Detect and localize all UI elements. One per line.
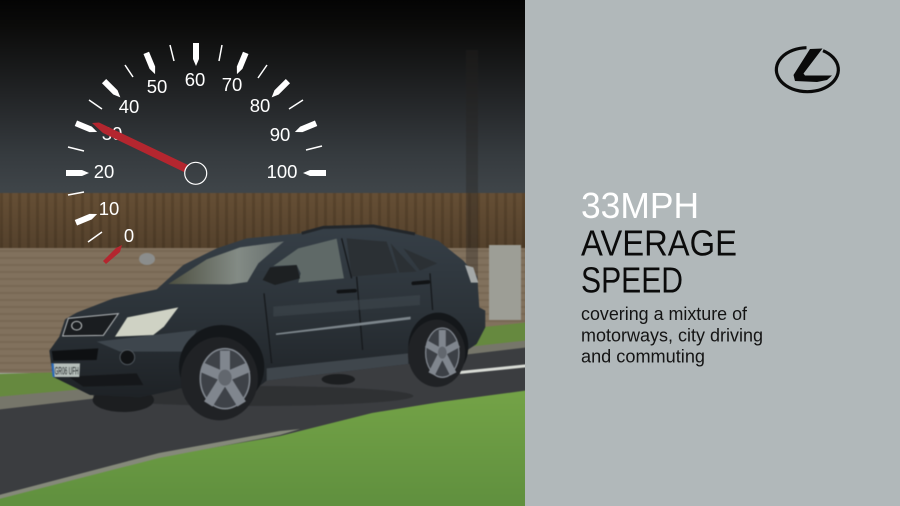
car [49,226,485,420]
car: lower vents [68,373,143,387]
gauge: hub [185,162,207,184]
gauge: speed labels: 60 [185,69,205,90]
car: badge [72,321,82,330]
road white line [460,364,530,374]
car: number plate [51,363,80,378]
gauge: speed labels: 40 [119,96,139,117]
car: body highlight [273,295,420,317]
heading: 33MPH: 33MPH [581,185,699,226]
car: headlight [115,307,178,337]
car: quarter window two [403,248,437,271]
photo background: brick wall [0,248,530,373]
car: GR06 UFH [55,366,79,378]
gauge: speed labels [94,69,297,246]
text block: description: motorways, city driving [581,326,763,346]
gauge: speed labels: 20 [94,161,114,182]
text block: description: covering a mixture of [581,304,748,324]
gauge: speed labels: 10 [99,198,119,219]
car: body [49,226,485,397]
gauge: speed labels: 100 [267,161,297,182]
photo background: upper wall [0,0,530,195]
car: side trim [276,317,411,335]
car: lower grille [52,348,98,361]
car: mirror [263,265,300,285]
car: sill [267,353,408,381]
car: door handles [338,282,428,292]
photo background: door [489,245,521,320]
road surface [0,347,530,500]
car: fog light [120,350,135,365]
heading: SPEED: SPEED [581,260,683,300]
foreground grass [0,390,530,506]
car: front wheel [181,337,258,420]
car: taillight [465,265,478,283]
car: bumper highlight [97,330,197,352]
gauge: speed labels: 50 [147,76,167,97]
car: roof rail [302,226,415,234]
text block: description [581,304,763,366]
photo background: brown cladding band [0,193,530,249]
car: rear side window [347,238,397,277]
car: door shutlines [264,238,433,363]
panel: right background [525,0,900,506]
photo background: band shading [0,193,530,249]
photo contents [0,0,530,506]
photo background: far grass [0,322,530,400]
gauge: zero tick [103,245,122,264]
car: front side window [273,239,344,283]
gauge: speed labels: 90 [270,124,290,145]
gauge: needle [92,122,188,172]
gauge: major ticks [66,43,326,226]
gauge: speed labels: 30 [102,123,122,144]
icon: Lexus logo [776,48,838,92]
photo background: wall lamp [139,253,155,265]
photo background: pillar [466,50,478,300]
speedometer gauge [66,43,326,264]
car: rear wheel arch [408,313,468,381]
heading: AVERAGE: AVERAGE [581,222,737,264]
car: upper grille [63,314,118,336]
gauge: minor ticks [68,45,322,242]
car: far rear wheel [322,374,355,385]
car: windscreen [168,241,284,284]
car: shadow [93,386,413,406]
gauge: speed labels: 70 [222,74,242,95]
car: quarter window one [391,243,417,273]
gauge: speed labels: 80 [250,95,270,116]
foreground kerb [0,429,300,500]
car: front wheel arch [179,325,264,408]
photo: road scene with car [0,0,525,506]
car: far front wheel [93,388,154,412]
car: rear wheel [408,320,465,387]
gauge: speed labels: 0 [124,225,134,246]
text block: description: and commuting [581,346,705,366]
photo background: kerb [0,340,530,411]
